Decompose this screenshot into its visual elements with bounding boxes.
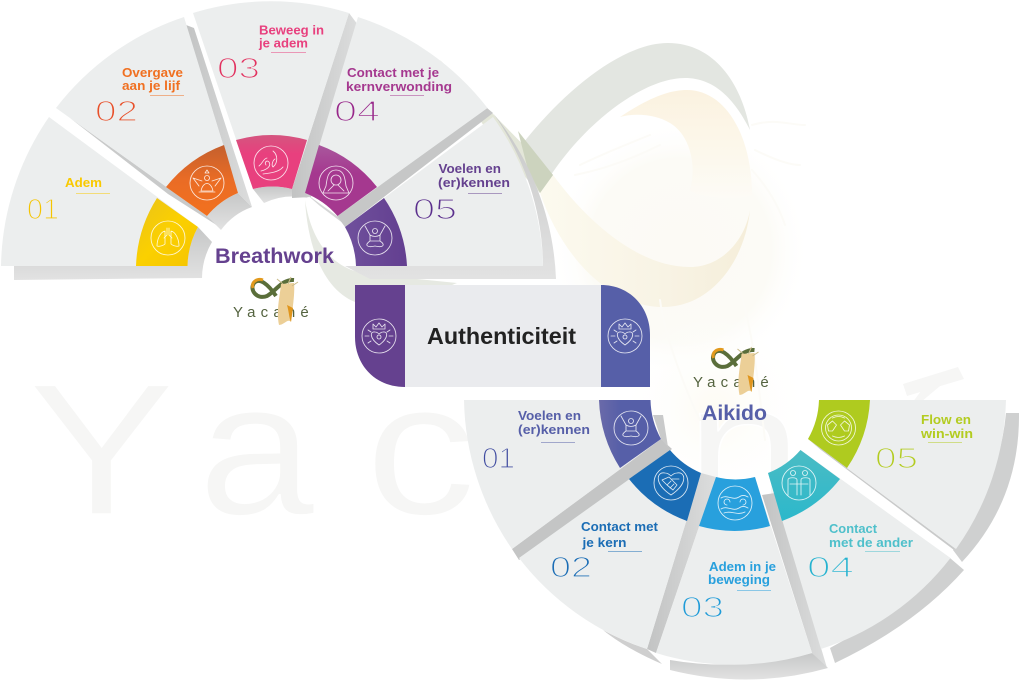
label: Adem in je beweging: Adem in je	[709, 559, 776, 574]
icon: figure with raised arms	[614, 411, 648, 445]
band: sky blue	[699, 477, 770, 531]
icon: lungs	[151, 221, 185, 255]
band: lime	[808, 400, 870, 468]
panel: Breathwork 01 Adem	[1, 117, 198, 266]
icon: figure with raised arms	[358, 221, 392, 255]
logo: Yacané Breathwork	[233, 277, 314, 325]
label: Contact met de ander	[829, 521, 913, 550]
label: Overgave aan je lijf	[122, 65, 183, 93]
label: Voelen en (er)kennen: Voelen en	[518, 408, 581, 423]
panel: Breathwork 05 Voelen en (er)kennen	[345, 117, 543, 266]
label: Adem in je beweging: beweging	[708, 572, 770, 587]
logo: Yacané Aikido	[693, 347, 774, 395]
label: Voelen en (er)kennen: (er)kennen	[438, 175, 510, 190]
watermark: large Yacané lettering: a	[198, 343, 315, 555]
label: Contact met je kern: je kern	[581, 535, 627, 550]
label: Contact met je kernverwonding: kernverwonding	[346, 79, 452, 94]
icon: two people	[782, 466, 816, 500]
watermark: large Yacané lettering	[28, 342, 978, 555]
band: pink	[236, 135, 307, 189]
number 01: 01	[27, 194, 59, 226]
band: indigo	[599, 400, 661, 468]
label: Overgave aan je lijf: aan je lijf	[122, 78, 181, 93]
watermark: large Yacané lettering: é	[872, 343, 978, 555]
band: yellow	[136, 198, 198, 266]
panel: Aikido 05 Flow en win-win	[808, 400, 1006, 549]
number 04: 04	[807, 552, 854, 584]
label: Beweeg in je adem: je adem	[258, 36, 308, 50]
watermark: large Yacané lettering: a	[528, 343, 645, 555]
heading: Aikido: Aikido	[702, 402, 767, 425]
watermark: large Yacané lettering: c	[365, 342, 476, 554]
icon: swirling breath	[254, 146, 288, 180]
right cap	[601, 285, 650, 387]
left cap	[355, 285, 405, 387]
panel: Aikido 01 Voelen en (er)kennen	[464, 400, 661, 549]
icon: heart with crown left	[362, 319, 396, 353]
panel: Breathwork 03 Beweeg in je adem	[193, 1, 349, 189]
label: Contact met de ander: Contact	[829, 521, 878, 536]
band: teal	[768, 450, 840, 521]
band: orange	[166, 145, 238, 216]
logo: Yacané Breathwork: Yacané	[233, 304, 314, 321]
band: purple	[345, 198, 407, 266]
logo: Yacané Aikido: Yacané	[693, 374, 774, 391]
icon: veiled figure	[319, 166, 353, 200]
panel: Aikido 03 Adem in je beweging	[656, 477, 812, 665]
label: Contact met de ander: met de ander	[829, 535, 913, 550]
number 03: 03	[217, 53, 260, 85]
label: Voelen en (er)kennen	[518, 408, 590, 437]
label: Flow en win-win	[920, 412, 973, 441]
number 02: 02	[95, 96, 138, 128]
label: Flow en win-win: win-win	[920, 426, 973, 441]
band: blue	[629, 450, 701, 521]
panel: Breathwork 02 Overgave aan je lijf	[56, 17, 238, 216]
label: Beweeg in je adem: Beweeg in	[259, 22, 324, 38]
number 05: 05	[875, 443, 918, 475]
icon: handshake in heart	[654, 466, 688, 500]
label: Contact met je kern	[581, 519, 659, 550]
label: Contact met je kernverwonding	[346, 65, 452, 94]
panel: Authenticiteit banner	[355, 285, 650, 387]
label: Contact met je kernverwonding: Contact met je	[347, 65, 439, 80]
heading: Breathwork: Breathwork	[215, 245, 334, 268]
icon: heart with crown right	[608, 319, 642, 353]
label: Voelen en (er)kennen: (er)kennen	[518, 422, 590, 437]
number 01: 01	[482, 443, 515, 475]
label: Voelen en (er)kennen: Voelen en	[438, 161, 501, 176]
panel: Breathwork 04 Contact met je kernverwonding	[305, 17, 488, 216]
shadows: Breathwork fan	[14, 13, 556, 280]
title: Authenticiteit: Authenticiteit	[427, 323, 576, 349]
icon: hands in circle	[822, 411, 856, 445]
number 02: 02	[550, 552, 592, 584]
number 05: 05	[413, 194, 457, 226]
number 03: 03	[681, 592, 724, 624]
label: Adem: Adem	[65, 175, 102, 190]
label: Adem in je beweging	[708, 559, 776, 587]
watermark: large Yacané lettering: Y	[28, 346, 175, 554]
label: Voelen en (er)kennen	[438, 161, 510, 190]
shadows: Aikido fan	[512, 413, 1019, 680]
icon: air waves	[718, 486, 752, 520]
icon: meditating figure	[190, 166, 224, 200]
label: Overgave aan je lijf: Overgave	[122, 65, 183, 80]
panel: Aikido 02 Contact met je kern	[519, 450, 701, 649]
label: Contact met je kern: Contact met	[581, 519, 659, 534]
band: magenta	[305, 145, 377, 216]
watermark: large Yacané lettering: n	[686, 343, 802, 555]
label: Beweeg in je adem	[258, 22, 324, 50]
number 04: 04	[334, 96, 380, 128]
panel: Aikido 04 Contact met de ander	[768, 450, 950, 649]
background: infinity swoosh and feather	[305, 43, 805, 440]
background: feather glow	[550, 120, 815, 510]
label: Flow en win-win: Flow en	[921, 412, 971, 427]
